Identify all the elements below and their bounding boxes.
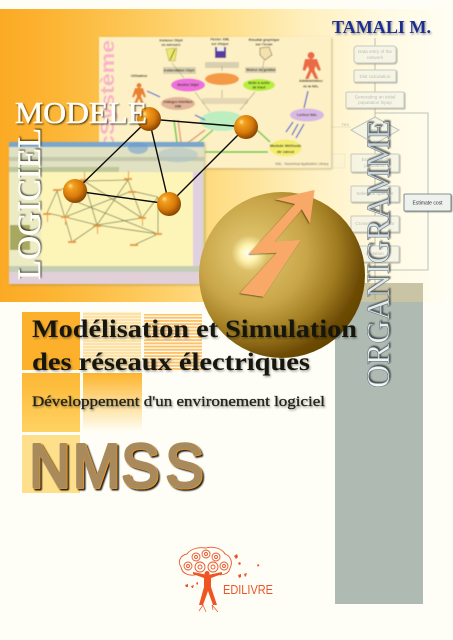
flowchart: organigramme bbox=[320, 38, 428, 300]
title: des réseaux électriques bbox=[32, 349, 310, 376]
subtitle: Développement d'un environement logiciel bbox=[32, 394, 325, 410]
icon: Edilivre tree logo bbox=[179, 547, 260, 612]
diagram connectors bbox=[147, 60, 308, 152]
diagram labels: Moteur de gestion bbox=[246, 68, 276, 72]
diagram labels: NAL : Numerical Application Library bbox=[275, 162, 329, 166]
icon: lightning bolt arrow bbox=[240, 190, 314, 297]
diagram labels: Fichier XML bbox=[210, 38, 230, 42]
diagram labels: Boite à outils bbox=[248, 81, 270, 85]
diagram labels: Instance Objet bbox=[159, 38, 184, 42]
diagram labels: en mémoire bbox=[161, 43, 181, 47]
title: Modélisation et Simulation bbox=[32, 316, 357, 343]
publisher name: Edilivre: EDILIVRE bbox=[223, 583, 273, 597]
flowchart box: estimate cost: Estimate cost bbox=[412, 200, 443, 206]
panel: system diagram bbox=[98, 37, 331, 168]
diagram labels: de tracé bbox=[252, 86, 266, 90]
flowchart: organigramme: Yes bbox=[341, 122, 349, 127]
diagram icons bbox=[132, 47, 321, 104]
diagram labels: Module Méthode bbox=[270, 143, 302, 148]
diagram labels bbox=[131, 38, 329, 166]
diagram labels: sur disque bbox=[211, 42, 229, 46]
diagram labels: Instanciation Objet bbox=[164, 68, 195, 72]
flowchart: organigramme: Stop bbox=[370, 128, 380, 133]
orange gradient header band bbox=[0, 9, 453, 302]
flowchart: organigramme: population hipop bbox=[358, 100, 392, 105]
diagram labels: Résultat graphique bbox=[249, 38, 279, 42]
NMSS logo text: NMSS bbox=[29, 431, 203, 501]
flowchart: organigramme: Data entry of the bbox=[358, 49, 392, 54]
flowchart: organigramme: Mutation bbox=[366, 251, 384, 256]
flowchart: organigramme: Dist calculation bbox=[360, 74, 391, 79]
diagram labels: de la NAL bbox=[303, 84, 319, 88]
decorative colour squares bbox=[22, 312, 202, 493]
flowchart: organigramme: network bbox=[367, 55, 384, 60]
flowchart: organigramme: Generating an initial bbox=[355, 94, 395, 100]
network links and spheres bbox=[63, 107, 258, 216]
large golden sphere bbox=[199, 192, 365, 358]
network diagram bbox=[47, 180, 158, 245]
diagram labels: sur l'écran bbox=[255, 42, 273, 46]
diagram labels: IHM bbox=[175, 104, 181, 108]
label: MODELE: MODELE bbox=[15, 95, 147, 130]
diagram labels: Lecteur NAL bbox=[297, 113, 317, 117]
diagram labels: Administrateur bbox=[299, 79, 324, 83]
diagram labels: Dialogue Interface bbox=[163, 100, 193, 104]
diagram labels: Modèle Objet bbox=[177, 83, 200, 87]
flowchart box: estimate cost bbox=[404, 194, 451, 211]
title bbox=[32, 316, 357, 376]
diagram ellipses and boxes bbox=[161, 62, 324, 156]
diagram labels: Utilisateur bbox=[131, 74, 148, 78]
diagram labels: de calcul bbox=[277, 149, 294, 154]
label: LOGICIEL: LOGICIEL bbox=[12, 128, 48, 280]
panel: software screenshot bbox=[9, 142, 204, 284]
label: ORGANIGRAMME: ORGANIGRAMME bbox=[361, 120, 397, 388]
flowchart: organigramme: population bbox=[364, 163, 386, 168]
grey vertical panel bbox=[335, 283, 423, 604]
NMSS logo text: NMSS bbox=[30, 431, 204, 501]
flowchart: organigramme: Selection operator bbox=[356, 191, 394, 196]
panel: system diagram: cSystème bbox=[98, 40, 119, 148]
flowchart: organigramme: Evaluation of bbox=[362, 157, 389, 162]
author: TAMALI M.: TAMALI M. bbox=[332, 17, 431, 37]
flowchart: organigramme: Crossover operator bbox=[355, 221, 395, 226]
